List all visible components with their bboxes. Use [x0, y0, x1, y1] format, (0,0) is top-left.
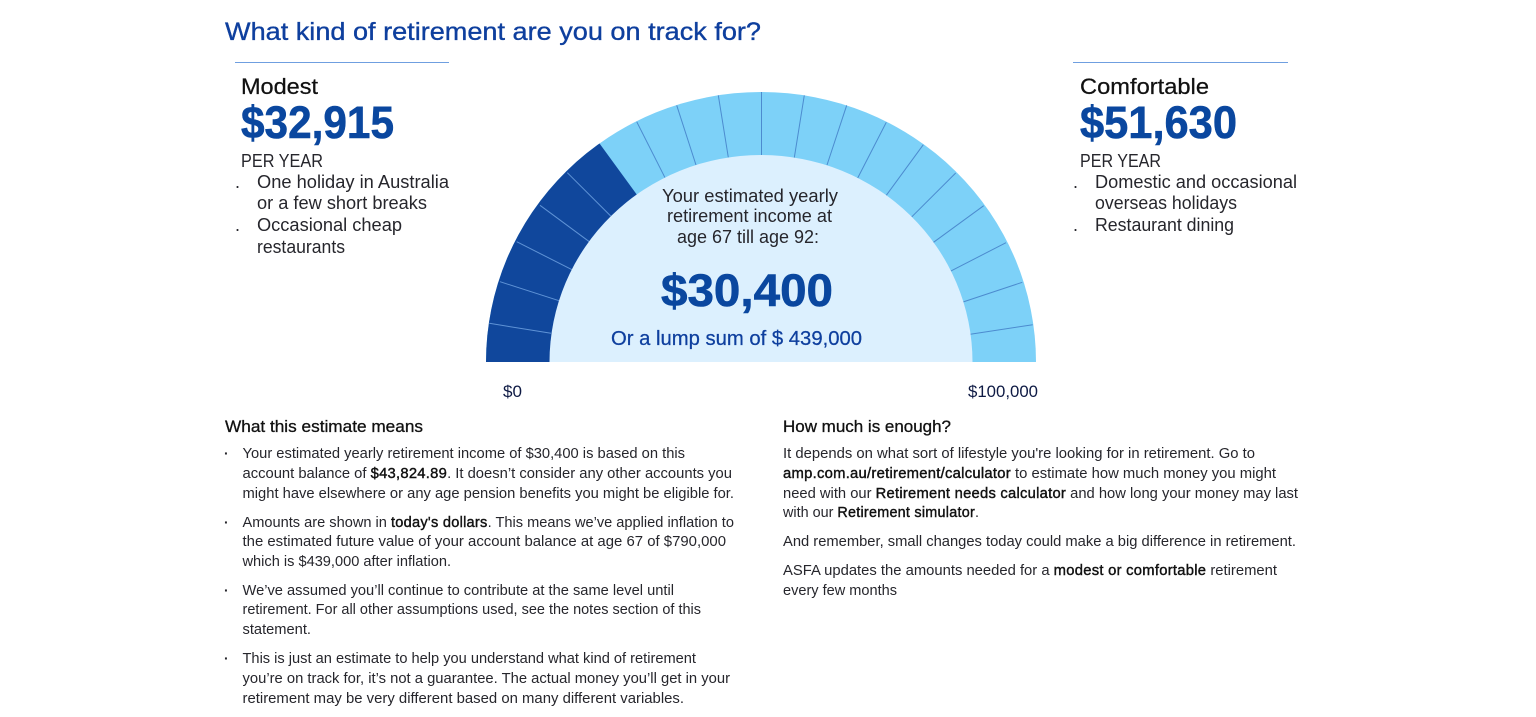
estimate bullet 2: which is $439,000 after inflation.	[241, 554, 451, 570]
estimate bullet 4	[224, 650, 730, 707]
gauge inner semicircle	[550, 155, 972, 362]
enough heading: How much is enough?	[783, 418, 951, 436]
infographic	[224, 22, 1298, 706]
panel: what this estimate means	[224, 418, 734, 707]
estimate bullet 3: statement.	[242, 622, 311, 638]
enough paragraph 1: need with our Retirement needs calculator and how long your money may last	[783, 486, 1298, 502]
enough paragraph 3: every few months	[783, 583, 897, 599]
comfortable list: overseas holidays	[1095, 193, 1237, 213]
gauge caption: Your estimated yearly	[662, 186, 838, 206]
estimate heading: What this estimate means	[225, 418, 423, 436]
modest list: One holiday in Australia	[257, 172, 450, 192]
estimate bullet 1: might have elsewhere or any age pension benefits you might be eligible for.	[242, 486, 734, 502]
panel: comfortable	[1073, 62, 1297, 235]
comfortable amount: $51,630	[1080, 97, 1237, 148]
modest list: or a few short breaks	[257, 193, 427, 213]
enough paragraph 2: And remember, small changes today could make a big difference in retirement.	[783, 534, 1296, 550]
estimate bullet 1	[224, 445, 734, 502]
gauge amount: $30,400	[661, 265, 833, 316]
comfortable list: .	[1073, 215, 1078, 235]
comfortable list	[1073, 172, 1297, 235]
estimate bullet 4: ·	[224, 650, 229, 666]
estimate bullet 4: retirement may be very different based on many different variables.	[242, 691, 684, 707]
estimate bullet 3	[224, 582, 701, 638]
estimate bullet 2: the estimated future value of your account balance at age 67 of $790,000	[242, 534, 726, 550]
enough paragraph 3: ASFA updates the amounts needed for a modest or comfortable retirement	[783, 563, 1277, 579]
estimate bullet 2	[224, 514, 734, 570]
estimate bullet 3: retirement. For all other assumptions used, see the notes section of this	[242, 602, 701, 618]
panel: modest	[235, 62, 450, 257]
gauge caption	[662, 186, 838, 247]
modest amount: $32,915	[241, 97, 394, 148]
estimate bullet 2: Amounts are shown in today's dollars. This means we’ve applied inflation to	[242, 515, 734, 531]
comfortable per year: PER YEAR	[1080, 151, 1161, 171]
estimate bullet 1: ·	[224, 445, 229, 461]
gauge remaining segments	[486, 92, 1036, 362]
panel: how much is enough	[782, 418, 1298, 599]
lump sum: Or a lump sum of $ 439,000	[611, 328, 862, 350]
estimate bullet 1: Your estimated yearly retirement income of $30,400 is based on this	[242, 446, 685, 462]
estimate bullet 3: ·	[224, 582, 229, 598]
axis maximum: $100,000	[968, 382, 1038, 401]
enough paragraph 1: amp.com.au/retirement/calculator to estimate how much money you might	[783, 466, 1276, 482]
comfortable list: Restaurant dining	[1095, 215, 1234, 235]
estimate bullet 4: you’re on track for, it’s not a guarantee. The actual money you’ll get in your	[242, 671, 730, 687]
gauge chart	[486, 92, 1038, 400]
enough paragraph 1: with our Retirement simulator.	[782, 505, 979, 521]
enough paragraph 1	[782, 446, 1298, 521]
gauge caption: age 67 till age 92:	[677, 227, 819, 247]
enough paragraph 1: It depends on what sort of lifestyle you're looking for in retirement. Go to	[783, 446, 1255, 462]
modest list: .	[235, 215, 240, 235]
enough paragraph 3	[783, 563, 1277, 599]
estimate bullet 1: account balance of $43,824.89. It doesn’t consider any other accounts you	[242, 466, 732, 482]
modest list	[235, 172, 450, 257]
estimate bullet 2: ·	[224, 514, 229, 530]
modest heading: Modest	[241, 74, 318, 99]
gauge filled segments	[486, 144, 637, 362]
modest list: .	[235, 172, 240, 192]
estimate bullet 3: We’ve assumed you’ll continue to contribute at the same level until	[242, 583, 674, 599]
modest list: Occasional cheap	[257, 215, 402, 235]
title: What kind of retirement are you on track for?	[225, 18, 761, 46]
axis minimum: $0	[503, 382, 522, 401]
comfortable list: .	[1073, 172, 1078, 192]
comfortable list: Domestic and occasional	[1095, 172, 1297, 192]
modest per year: PER YEAR	[241, 151, 323, 171]
comfortable heading: Comfortable	[1080, 74, 1209, 99]
modest list: restaurants	[257, 237, 345, 257]
gauge caption: retirement income at	[667, 206, 832, 226]
estimate bullet 4: This is just an estimate to help you understand what kind of retirement	[242, 651, 696, 667]
